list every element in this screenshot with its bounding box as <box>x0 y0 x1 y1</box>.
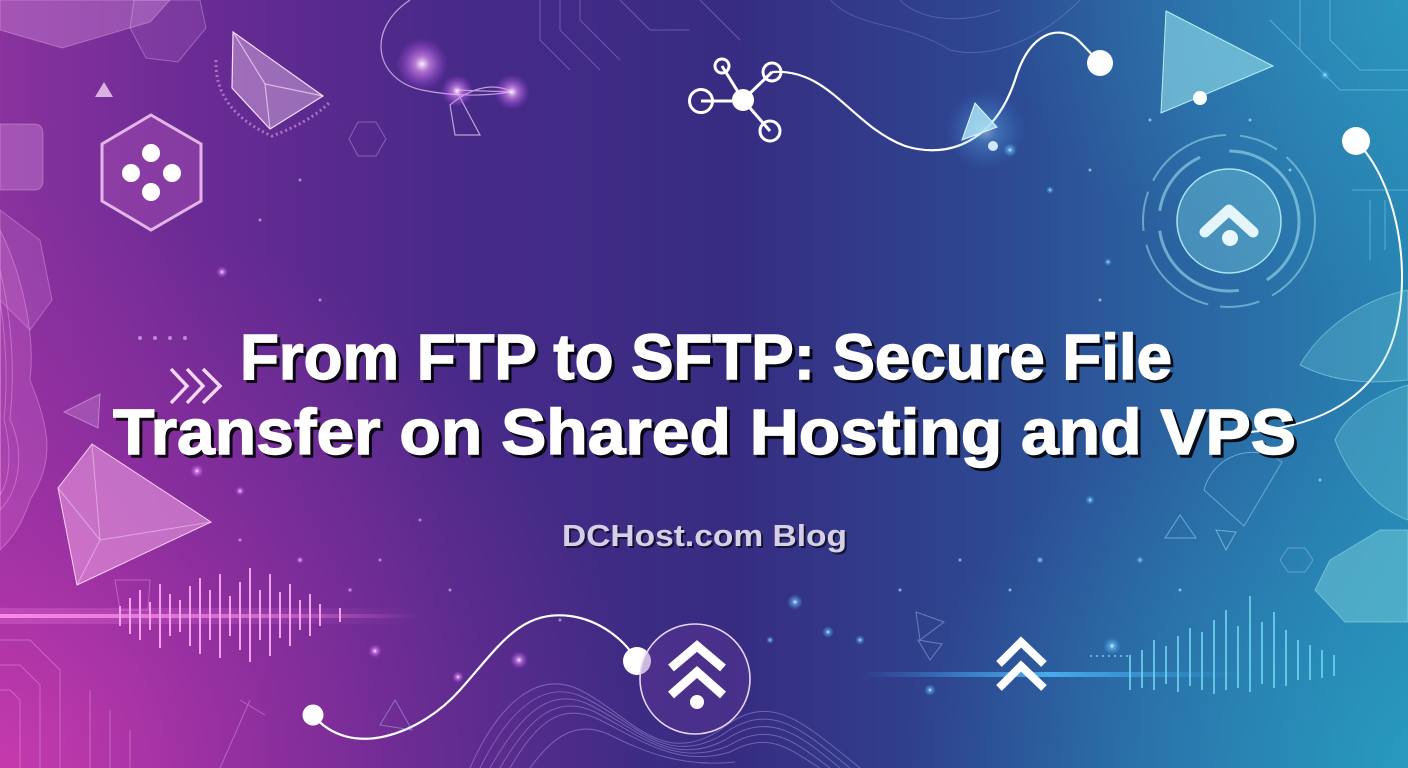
decoration: top-left translucent shapes <box>0 0 206 330</box>
icon: glowing arrowhead <box>945 90 1025 170</box>
title: Transfer on Shared Hosting and VPS <box>113 396 1296 468</box>
title: From FTP to SFTP: Secure File <box>240 321 1172 393</box>
icon: circled double chevron <box>640 624 750 734</box>
decoration: bottom wave mesh <box>470 684 860 768</box>
network icon with curve top-center <box>690 33 1113 150</box>
decoration: right circuit traces <box>1270 0 1408 260</box>
particles: glowing dots <box>138 70 1330 696</box>
icon: translucent triangle top-right <box>1161 11 1273 113</box>
curve: bottom S connector <box>302 615 651 739</box>
subtitle: DCHost.com Blog <box>564 520 849 555</box>
icon: double chevron right <box>999 642 1044 688</box>
beam: pink audio wave left <box>0 568 420 662</box>
decoration: small outlined hexagon <box>349 122 386 156</box>
decoration: bottom-left circuit traces <box>0 580 265 768</box>
title <box>113 321 1299 471</box>
decoration: bottom outlined triangles <box>380 548 1313 730</box>
icon: translucent crystal top-left <box>216 32 330 136</box>
network: glowing purple nodes <box>381 0 530 135</box>
icon: translucent triangle left <box>58 394 211 585</box>
title: From FTP to SFTP: Secure File <box>243 324 1175 396</box>
icon: hexagon with four dots <box>102 115 201 230</box>
curve: right connector with node <box>1233 127 1402 438</box>
icon: chevrons left of title <box>171 369 220 403</box>
decoration: left wave mesh <box>0 230 47 550</box>
icon: circular upload dial <box>1143 135 1315 307</box>
beam: blue audio wave right <box>860 596 1334 694</box>
decoration: circuit lines top <box>540 0 1080 70</box>
subtitle: DCHost.com Blog <box>562 518 847 553</box>
title: Transfer on Shared Hosting and VPS <box>116 399 1299 471</box>
decoration: right wave mesh <box>1165 290 1408 622</box>
